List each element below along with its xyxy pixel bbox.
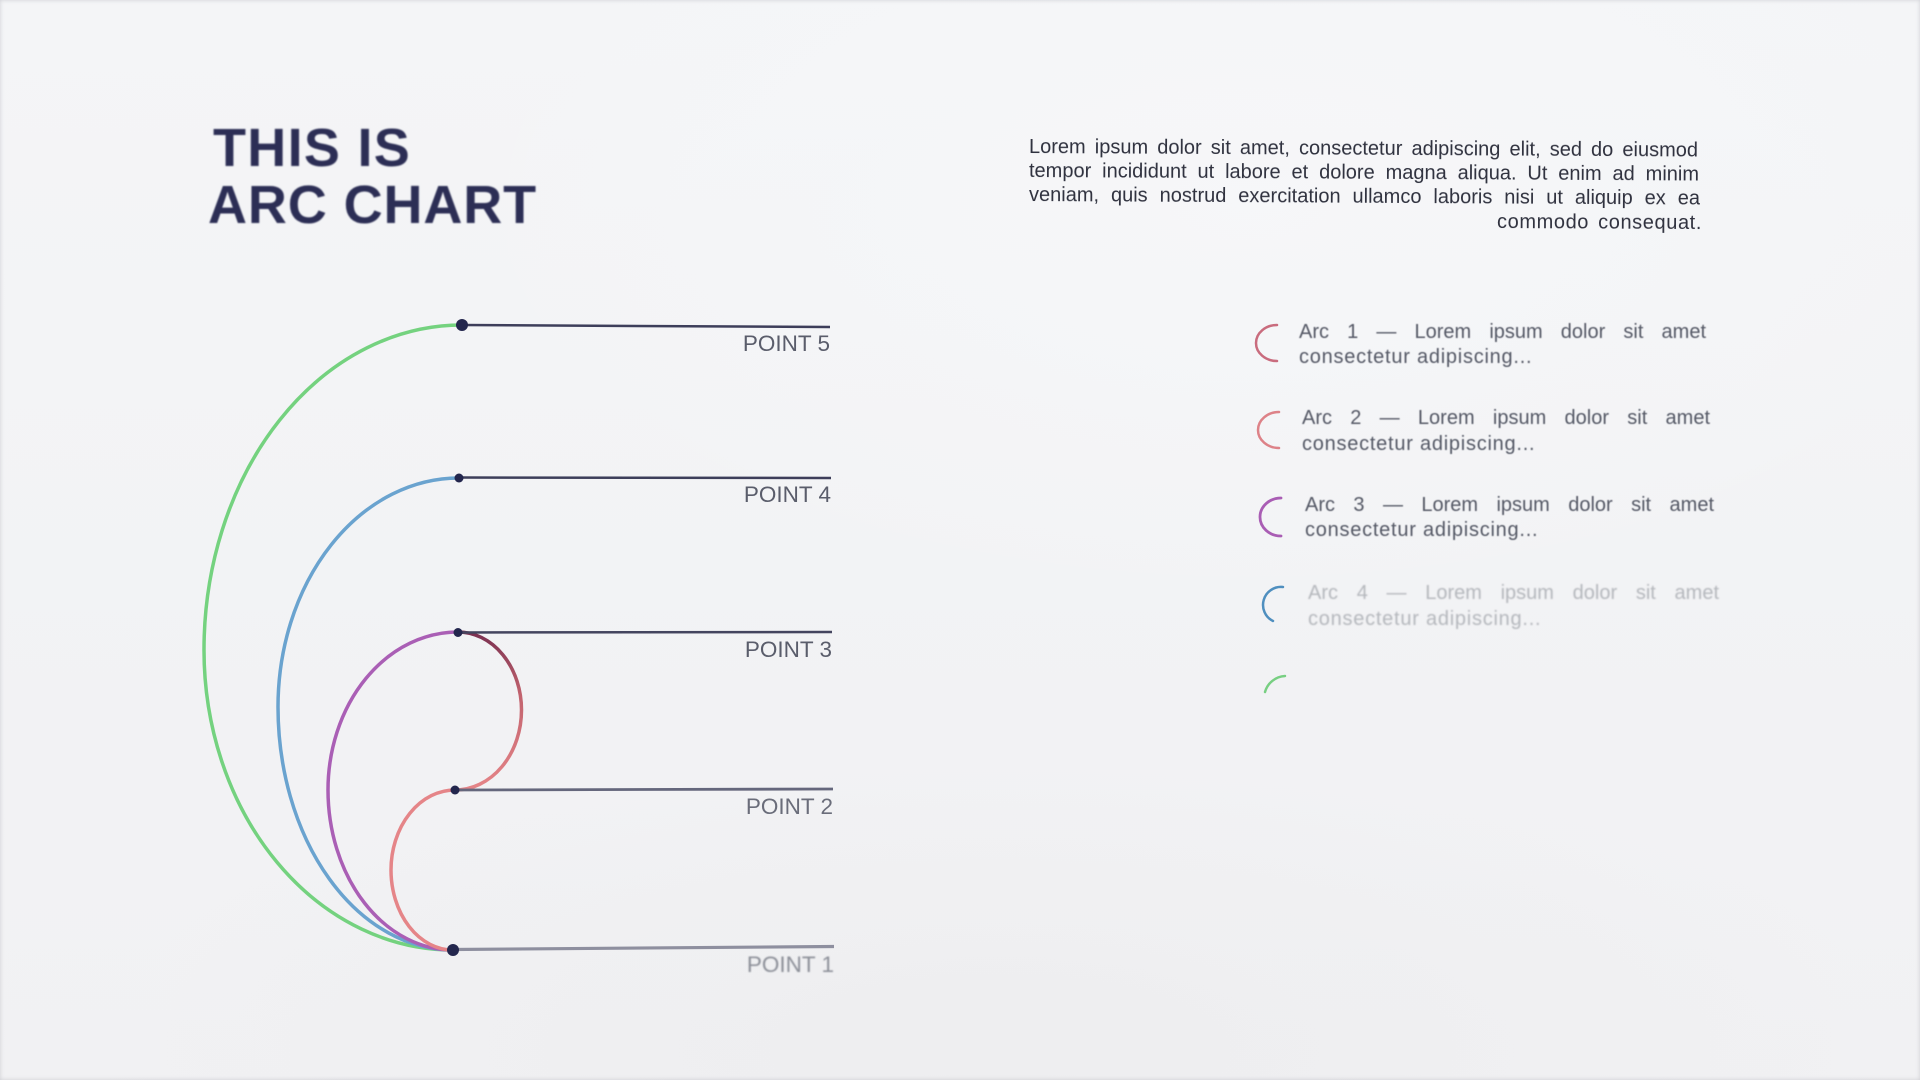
intro paragraph: commodo consequat.: [1497, 211, 1702, 234]
icon: arc 3 swatch: [1258, 496, 1282, 538]
arc 1: red upper, point 2 to point 3: [455, 632, 522, 790]
title: ARC CHART: [208, 175, 537, 235]
arc 4: blue, point 1 to point 4: [278, 478, 459, 950]
point 5 line: POINT 5: [743, 331, 830, 356]
legend item: arc 3: consectetur adipiscing...: [1305, 519, 1538, 541]
legend text 1: Arc 1 — Lorem ipsum dolor sit amet: [1299, 321, 1706, 343]
legend item: arc 1: [1254, 321, 1707, 368]
legend item: arc 4: consectetur adipiscing...: [1308, 608, 1541, 630]
point 1 line: POINT 1: [747, 952, 834, 977]
icon: arc 1 swatch: [1254, 324, 1278, 362]
arc chart: [202, 319, 834, 977]
legend item: arc 2: [1256, 407, 1711, 455]
point 4 line: POINT 4: [744, 482, 831, 507]
intro paragraph: [1029, 136, 1702, 234]
point 3 line: [454, 628, 832, 662]
legend item: arc 3: [1258, 494, 1715, 541]
title: THIS IS: [213, 118, 411, 178]
icon: arc 2 swatch: [1256, 410, 1280, 450]
legend item: arc 1: consectetur adipiscing...: [1299, 346, 1532, 368]
point 2 line: POINT 2: [746, 794, 833, 819]
legend text 3: Arc 3 — Lorem ipsum dolor sit amet: [1305, 494, 1714, 516]
legend item: arc 4: [1262, 582, 1720, 630]
arc 2: red lower, point 1 to point 2: [391, 790, 455, 950]
title: [208, 118, 537, 235]
legend item: arc 2: consectetur adipiscing...: [1302, 433, 1535, 455]
point 2 line: [450, 786, 833, 819]
point 3 line: POINT 3: [745, 637, 832, 662]
intro paragraph: tempor incididunt ut labore et dolore magna aliqua. Ut enim ad minim: [1029, 160, 1699, 186]
intro paragraph: Lorem ipsum dolor sit amet, consectetur adipiscing elit, sed do eiusmod: [1029, 136, 1698, 162]
legend text 2: Arc 2 — Lorem ipsum dolor sit amet: [1302, 407, 1710, 429]
legend text 4: Arc 4 — Lorem ipsum dolor sit amet: [1308, 582, 1719, 604]
icon: arc 4 swatch: [1262, 586, 1284, 622]
arc 5: green, point 1 to point 5: [204, 325, 462, 950]
point 4 line: [454, 474, 831, 507]
icon: arc 5 swatch: [1264, 674, 1286, 694]
arc 3: purple, point 1 to point 3: [328, 632, 458, 950]
point 5 line: [456, 319, 830, 356]
point 1 line: [447, 944, 834, 977]
intro paragraph: veniam, quis nostrud exercitation ullamco laboris nisi ut aliquip ex ea: [1029, 184, 1700, 210]
